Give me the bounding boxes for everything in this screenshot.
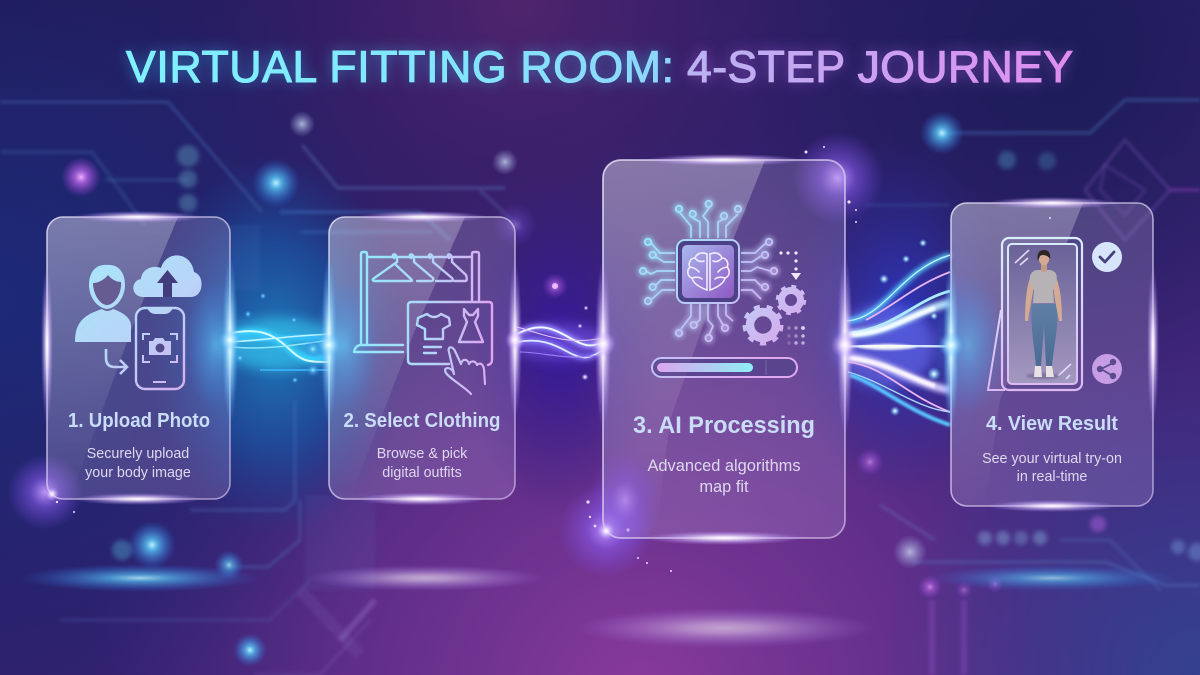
title: VIRTUAL FITTING ROOM:: [126, 43, 674, 92]
pointing hand: [445, 347, 485, 394]
arrow into phone: [106, 349, 127, 374]
description: in real-time: [1017, 469, 1087, 485]
heading: 1. Upload Photo: [68, 410, 210, 432]
card glare: [329, 217, 465, 499]
dotted arrow: [779, 251, 801, 280]
horizontal floor light streaks: [20, 564, 1177, 648]
circuit traces: [640, 201, 777, 341]
touchscreen: [408, 302, 492, 365]
panel: step 4 view result: [930, 203, 1153, 506]
icon: AI chip with brain, circuits and gears: [640, 201, 805, 345]
card glare: [47, 217, 178, 499]
icon: share badge: [1092, 354, 1122, 384]
card edge glows: [41, 154, 1159, 545]
description: See your virtual try-on: [982, 451, 1122, 467]
card glare: [951, 203, 1083, 506]
description: [377, 446, 468, 481]
icon: clothes rack and touchscreen: [354, 252, 492, 394]
cloud with up arrow: [133, 255, 202, 297]
panel: step 2 select clothing: [311, 217, 515, 499]
legs: [1031, 304, 1057, 366]
sparkle dots: [56, 146, 1051, 572]
small gear: [778, 287, 804, 313]
title: VIRTUAL FITTING ROOM:: [126, 43, 674, 92]
energy stream: step 3 to step 4: [835, 239, 950, 425]
icon: check badge: [1092, 242, 1122, 272]
description: Advanced algorithms: [647, 457, 801, 475]
camera frame: [143, 334, 177, 362]
top: [1030, 270, 1057, 303]
description: [647, 457, 801, 496]
hangers: [373, 254, 412, 281]
smartphone: [136, 308, 184, 389]
description: Browse & pick: [377, 446, 468, 462]
energy stream: step 2 to step 3: [510, 283, 610, 380]
neck and head: [1041, 264, 1047, 272]
title: 4-STEP JOURNEY: [687, 43, 1073, 92]
inner edge light: [589, 450, 661, 550]
card glare: [603, 160, 765, 538]
title: [126, 43, 1073, 92]
arms: [1025, 275, 1034, 321]
icon: mirror with person: [988, 238, 1082, 390]
description: digital outfits: [382, 465, 462, 481]
person: [75, 309, 131, 342]
avatar: [1025, 250, 1062, 379]
description: [85, 446, 191, 481]
panel: step 3 AI processing: [589, 160, 845, 550]
inner edge light: [930, 275, 1006, 415]
heading: 2. Select Clothing: [344, 410, 500, 432]
inner edge light: [311, 280, 379, 410]
panel: step 1 upload photo: [47, 217, 245, 499]
shoes: [1034, 366, 1054, 377]
heading: 3. AI Processing: [633, 412, 815, 439]
energy stream: step 1 to step 2: [218, 292, 342, 384]
large gear: [745, 307, 781, 343]
rack frame: [361, 252, 479, 345]
title: 4-STEP JOURNEY: [687, 43, 1073, 92]
description: [982, 451, 1122, 485]
chip: [677, 240, 739, 303]
inner edge light: [185, 280, 245, 410]
dress: [459, 309, 483, 342]
description: map fit: [699, 478, 749, 496]
heading: 4. View Result: [986, 413, 1118, 435]
t-shirt: [417, 314, 450, 339]
text lines: [424, 347, 441, 353]
progress bar: [652, 358, 797, 377]
brain: [688, 253, 729, 290]
description: Securely upload: [87, 446, 189, 462]
description: your body image: [85, 465, 191, 481]
icon: user with cloud upload to phone: [75, 255, 202, 389]
dot matrix: [787, 326, 805, 345]
